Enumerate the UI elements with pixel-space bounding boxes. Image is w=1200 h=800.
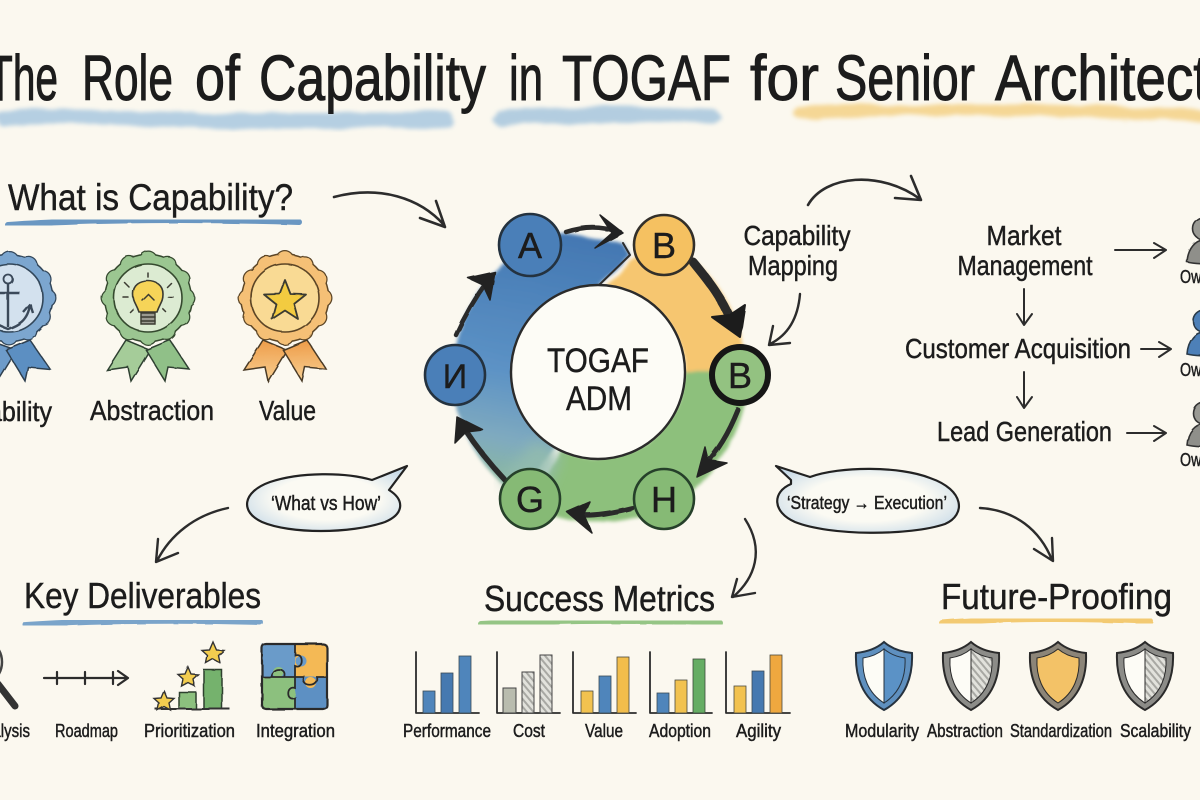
label: capability mapping: Mapping: [748, 250, 838, 281]
label: performance: Performance: [403, 721, 491, 741]
panel: future proofing: [845, 576, 1191, 741]
label: prioritization: Prioritization: [144, 721, 235, 741]
diagram: TOGAF ADM cycle: [425, 214, 768, 533]
callout: what vs how: ‘What vs How’: [271, 493, 381, 515]
text: market management: [958, 220, 1093, 281]
label: value: Value: [585, 721, 623, 741]
chart: adoption: [650, 652, 712, 713]
title underline strokes: [4, 110, 1200, 121]
label: integration: Integration: [256, 721, 335, 741]
node: B green: B: [728, 355, 752, 396]
node: H: [634, 469, 694, 529]
title: [0, 42, 1200, 121]
label: capability mapping: Capability: [744, 220, 850, 251]
ring colour blend: [500, 440, 562, 505]
node: A: A: [518, 225, 542, 266]
badge: capability anchor: [0, 254, 54, 381]
heading: key deliverables: Key Deliverables: [24, 575, 261, 616]
label: cost: Cost: [513, 721, 545, 741]
callout: strategy to execution: ‘Strategy → Execution’: [787, 493, 947, 513]
callout: strategy to execution: [776, 466, 959, 533]
heading: future proofing: Future-Proofing: [941, 576, 1172, 617]
label: capability mapping: [744, 220, 850, 281]
shield: scalability: [1117, 642, 1173, 710]
chart: performance: [416, 652, 479, 713]
label: modularity: Modularity: [845, 721, 919, 741]
node: B green: [712, 347, 768, 403]
node: B yellow: B: [652, 225, 676, 266]
panel: success metrics: [403, 578, 790, 741]
arrow: what vs how to deliverables: [156, 508, 228, 562]
label: roadmap: Roadmap: [55, 721, 118, 741]
label: standardization: Standardization: [1010, 721, 1112, 741]
label: abstraction: Abstraction: [90, 395, 214, 426]
arrow: callout to future proofing: [980, 508, 1053, 561]
center hub: [511, 285, 685, 459]
label: agility: Agility: [736, 721, 781, 741]
label: value: Value: [259, 395, 316, 426]
label: scalability: Scalability: [1120, 721, 1191, 741]
owner icon: grey lower: [1187, 402, 1200, 447]
icon: puzzle: [262, 644, 327, 709]
label: adoption: Adoption: [649, 721, 711, 741]
chart: value: [573, 652, 636, 713]
icon: roadmap line: [44, 671, 128, 685]
icon: magnifier: [0, 638, 15, 706]
shield: standardization: [1030, 642, 1086, 710]
shield: abstraction: [943, 642, 999, 710]
node: B yellow: [634, 215, 694, 275]
blue ring notch: [597, 243, 630, 287]
text: market management: Management: [958, 250, 1093, 281]
node: mirrored N: [425, 345, 485, 405]
title text: in: [509, 42, 543, 114]
owner icon: grey: [1187, 218, 1200, 264]
callout: what vs how: [247, 466, 407, 531]
heading: what is capability: What is Capability?: [8, 177, 293, 218]
label: abstraction: Abstraction: [927, 721, 1003, 741]
chart: cost: [497, 652, 560, 713]
panel: key deliverables: [0, 575, 335, 741]
cycle arrows: [455, 215, 745, 533]
node: A: [499, 214, 561, 276]
node: G: [500, 469, 560, 529]
arrow: callout to success metrics: [732, 519, 756, 597]
owner icon: blue: [1187, 310, 1200, 356]
title text: of: [195, 42, 240, 114]
title text: TOGAF: [562, 42, 731, 114]
shield: modularity: [856, 642, 912, 710]
node: mirrored N: И: [443, 358, 467, 396]
title text: Senior: [835, 42, 975, 114]
title text: Role: [82, 42, 173, 114]
text: market management: Market: [986, 220, 1062, 251]
title text: for: [750, 42, 819, 114]
watercolor ring: [453, 232, 748, 522]
text: customer acquisition: Customer Acquisition: [905, 333, 1131, 364]
center hub: TOGAF: [547, 342, 649, 380]
panel: capability hierarchy: [905, 218, 1200, 470]
center hub: ADM: [566, 380, 632, 418]
chart: agility: [726, 652, 790, 713]
arrows: hierarchy and owners: [1017, 243, 1171, 441]
title text: Capability: [259, 42, 486, 114]
arrow: mapping to node B: [769, 294, 800, 345]
badge: abstraction lightbulb: [104, 254, 192, 381]
heading: success metrics: Success Metrics: [484, 578, 715, 619]
panel: what is capability: [0, 177, 330, 427]
arrow: what is capability to ADM: [334, 193, 445, 227]
node: H: H: [651, 479, 677, 520]
arrow: top arc to capability map: [808, 176, 921, 205]
icon: prioritization bars and stars: [154, 642, 230, 710]
text: lead generation: Lead Generation: [937, 416, 1112, 447]
badge: value star: [240, 254, 330, 381]
node: G: G: [516, 479, 544, 520]
